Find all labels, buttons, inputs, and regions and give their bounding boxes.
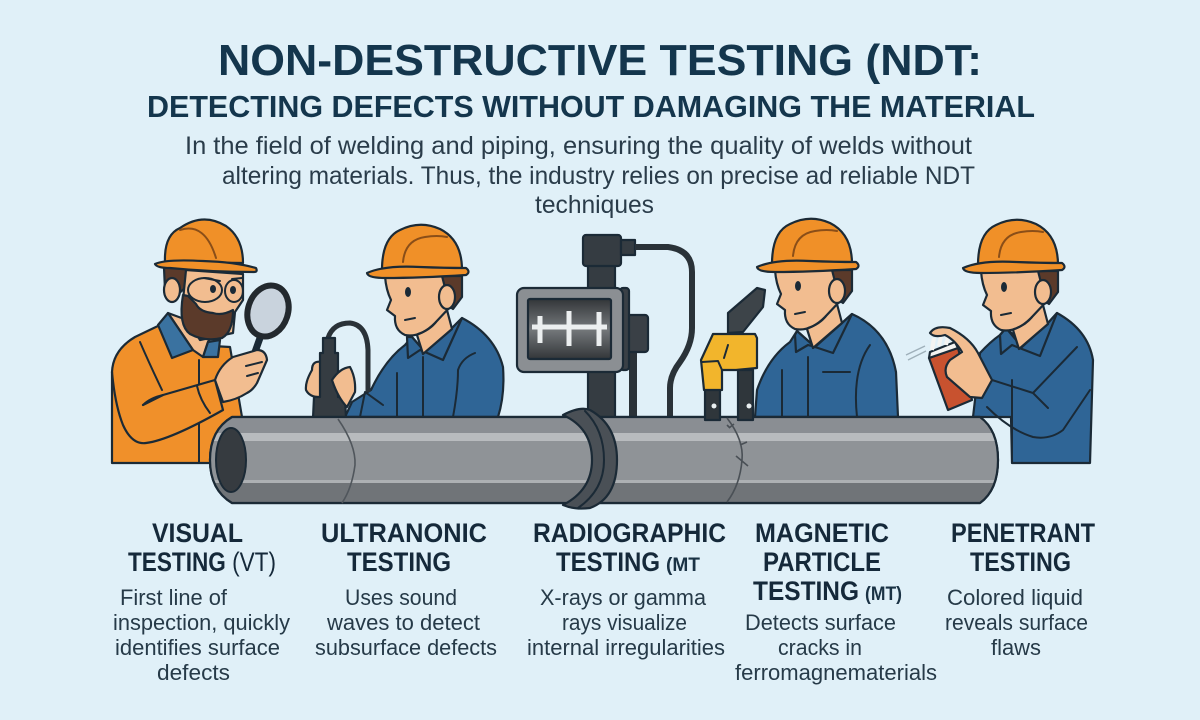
subtitle: DETECTING DEFECTS WITHOUT DAMAGING THE MATERIAL (147, 89, 1035, 124)
weld crack (727, 418, 748, 502)
column: ultrasonic testing: Uses sound (345, 585, 457, 610)
column: ultrasonic testing: subsurface defects (315, 635, 497, 660)
column: ultrasonic testing: ULTRANONIC (321, 518, 487, 548)
column: penetrant testing: flaws (991, 635, 1041, 660)
title: NON-DESTRUCTIVE TESTING (NDT: (218, 36, 982, 85)
left hand (306, 362, 322, 397)
column: visual testing: inspection, quickly (113, 610, 290, 635)
radiographic testing machine (517, 235, 692, 419)
column: radiographic testing: RADIOGRAPHIC (533, 518, 726, 548)
cable (635, 247, 692, 417)
column: visual testing (113, 518, 290, 685)
worker: ultrasonic testing (306, 225, 503, 418)
column: radiographic testing: internal irregularities (527, 635, 725, 660)
head unit (583, 235, 621, 266)
red spray can (929, 348, 972, 410)
intro paragraph: altering materials. Thus, the industry relies on precise ad reliable NDT (222, 162, 975, 190)
hand (215, 350, 267, 402)
column: visual testing: First line of (120, 585, 228, 610)
column: radiographic testing: TESTING (556, 547, 660, 577)
column: penetrant testing: reveals surface (945, 610, 1088, 635)
cable (328, 323, 368, 392)
column: magnetic particle testing: TESTING (753, 576, 859, 606)
column: radiographic testing: X-rays or gamma (540, 585, 707, 610)
column: magnetic particle testing: PARTICLE (763, 547, 881, 577)
beard (182, 295, 233, 339)
column (588, 264, 615, 419)
worker: visual testing (112, 219, 295, 463)
glasses (188, 278, 243, 302)
legs (705, 388, 720, 420)
side box (626, 315, 648, 352)
ultrasonic probe (313, 338, 346, 418)
column: visual testing: defects (157, 660, 230, 685)
column: penetrant testing: PENETRANT (951, 518, 1095, 548)
column: radiographic testing: (MT (666, 555, 700, 576)
clamp band (563, 409, 617, 509)
head with hard hat (367, 225, 468, 354)
pipe (205, 409, 1005, 509)
intro paragraph (185, 132, 975, 219)
weld image (532, 311, 607, 346)
column: magnetic particle testing: cracks in (778, 635, 862, 660)
column: visual testing: TESTING (VT) (128, 547, 276, 577)
pipe opening (216, 428, 246, 492)
sleeve (112, 372, 223, 443)
worker: magnetic particle testing (755, 219, 898, 417)
head (164, 268, 190, 300)
worker: penetrant testing (906, 220, 1093, 463)
column: magnetic particle testing (735, 518, 937, 685)
hard hat (165, 219, 243, 263)
handle (728, 288, 765, 333)
spray lines (906, 346, 926, 360)
intro paragraph: In the field of welding and piping, ensuring the quality of welds without (185, 132, 972, 160)
column: penetrant testing: Colored liquid (947, 585, 1083, 610)
column: visual testing: VISUAL (152, 518, 243, 548)
orange coverall (112, 325, 242, 463)
neck (168, 313, 214, 357)
intro paragraph: techniques (535, 191, 654, 219)
column: ultrasonic testing (315, 518, 497, 660)
column: magnetic particle testing: ferromagnematerials (735, 660, 937, 685)
weld seam (338, 419, 355, 503)
column: radiographic testing (527, 518, 726, 660)
column: magnetic particle testing: MAGNETIC (755, 518, 889, 548)
radiograph screen (528, 299, 611, 359)
yellow body (701, 334, 757, 390)
column: penetrant testing: TESTING (970, 547, 1071, 577)
monitor (620, 288, 629, 370)
column: radiographic testing: rays visualize (562, 610, 687, 635)
column: magnetic particle testing: (MT) (865, 584, 902, 605)
column: magnetic particle testing: Detects surface (745, 610, 896, 635)
column: ultrasonic testing: TESTING (347, 547, 451, 577)
collar (158, 313, 193, 358)
right hand (332, 367, 355, 407)
column: penetrant testing (945, 518, 1095, 660)
column: ultrasonic testing: waves to detect (326, 610, 480, 635)
magnifying glass (255, 338, 260, 352)
blue shirt (345, 318, 503, 417)
column: visual testing: identifies surface (115, 635, 280, 660)
magnetic yoke (701, 288, 765, 420)
hand (930, 327, 992, 398)
